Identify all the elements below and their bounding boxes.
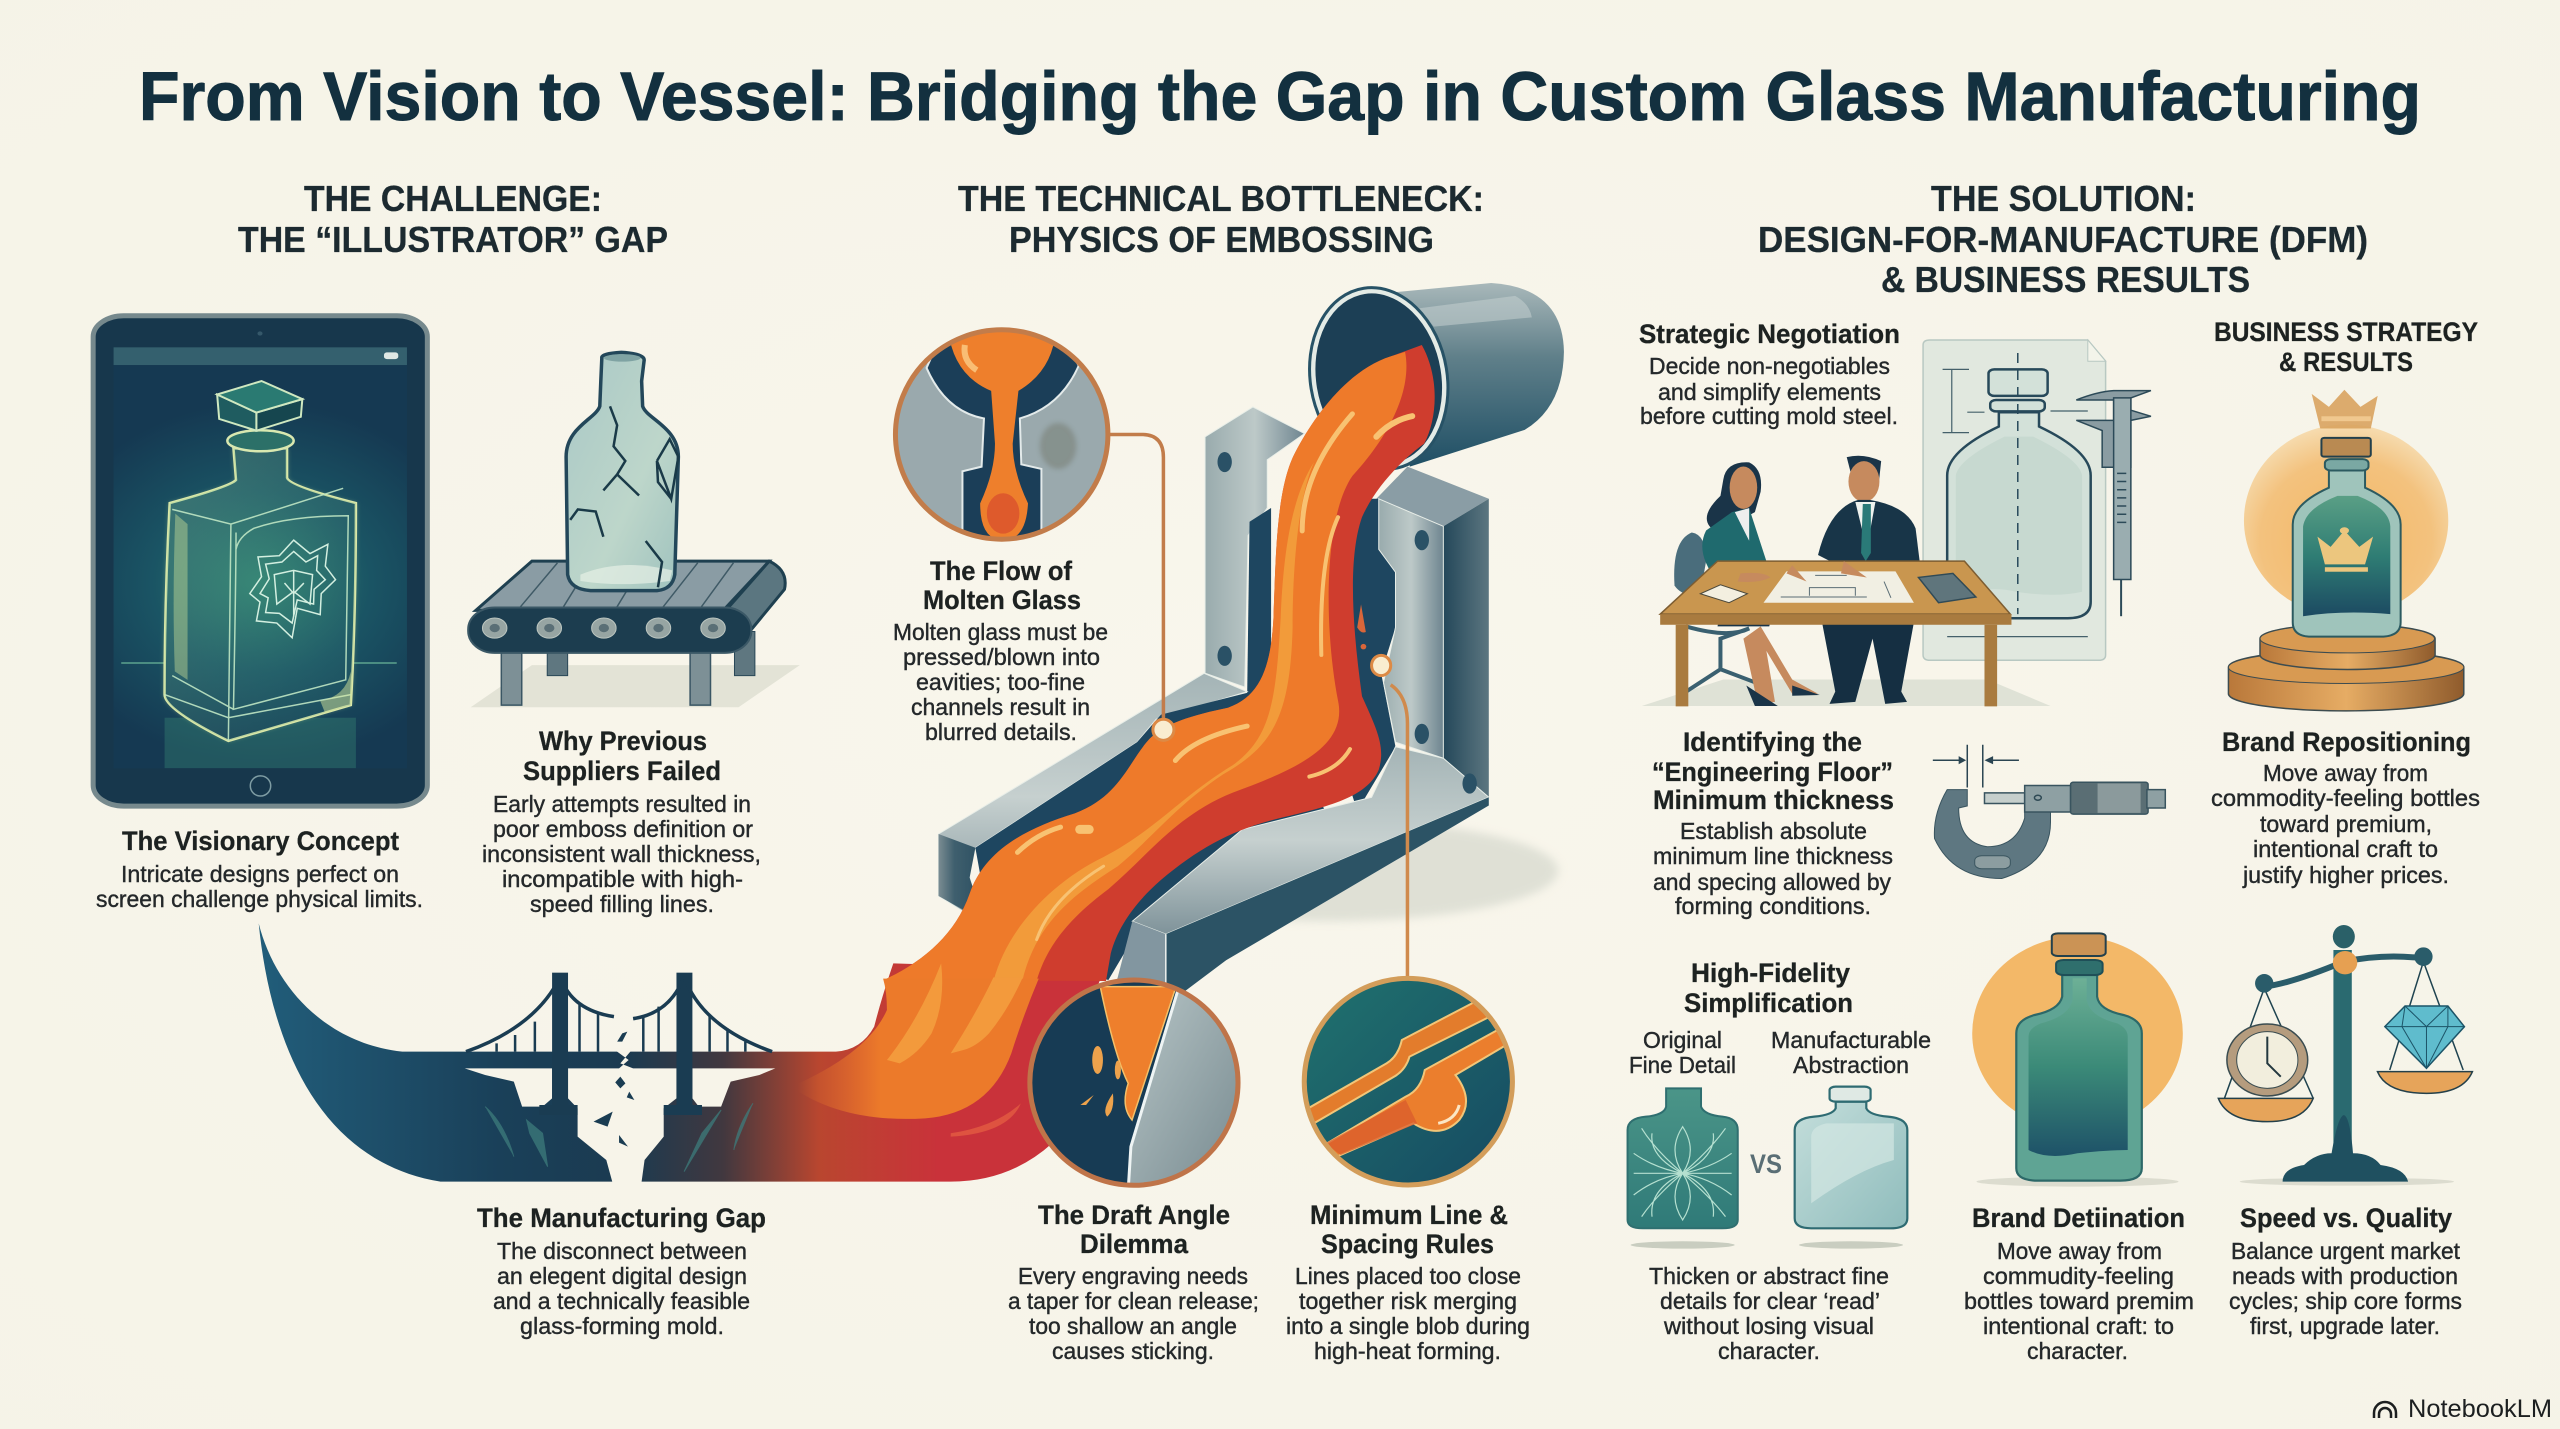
text: flow of molten glass [893, 556, 1108, 745]
text: the draft angle dilemma [1008, 1200, 1259, 1364]
text: simplification description: details for clear ‘read’ [1660, 1288, 1880, 1314]
text: why previous suppliers failed: Why Previous [539, 726, 707, 756]
icon: green bottle with sun [1972, 933, 2183, 1187]
text: flow of molten glass: channels result in [911, 694, 1090, 720]
text: why previous suppliers failed: poor emboss definition or [493, 816, 753, 842]
logo: NotebookLM: NotebookLM [2408, 1395, 2552, 1423]
text: the visionary concept: The Visionary Concept [122, 826, 399, 856]
label: manufacturable abstraction: Manufacturable [1771, 1027, 1931, 1053]
text: flow of molten glass: The Flow of [930, 556, 1073, 586]
text: the manufacturing gap: The disconnect between [497, 1238, 747, 1264]
text: brand definition: Move away from [1997, 1238, 2162, 1264]
text: flow of molten glass: eavities; too-fine [916, 669, 1085, 695]
text: simplification description: Thicken or abstract fine [1649, 1263, 1889, 1289]
text: speed vs quality: Balance urgent market [2231, 1238, 2461, 1264]
icon: crowned bottle on pedestal [2228, 390, 2464, 711]
heading: the challenge: THE “ILLUSTRATOR” GAP [238, 219, 668, 260]
text: simplification description: without losing visual [1663, 1313, 1874, 1339]
text: strategic negotiation: before cutting mold steel. [1640, 403, 1898, 429]
text: identifying the engineering floor: Minimum thickness [1653, 785, 1894, 815]
illustration: molten glass stream [791, 345, 1435, 1137]
illustration: blueprint bottle, caliper and negotiating team [1642, 340, 2151, 706]
heading: business strategy and results: BUSINESS STRATEGY [2214, 317, 2478, 347]
heading: business strategy and results: & RESULTS [2279, 347, 2413, 377]
circle: draft angle detail [1030, 977, 1249, 1190]
text: identifying the engineering floor: forming conditions. [1675, 893, 1871, 919]
text: high-fidelity simplification heading: High-Fidelity [1691, 958, 1850, 988]
text: brand definition: character. [2027, 1338, 2128, 1364]
heading: technical bottleneck: PHYSICS OF EMBOSSING [1009, 219, 1434, 260]
shape: manufacturing gap bridge merging into molten flow [259, 923, 1104, 1183]
circle: minimum line and spacing detail [1302, 978, 1512, 1185]
text: minimum line and spacing rules: high-heat forming. [1314, 1338, 1501, 1364]
circle: flow of molten glass detail [895, 324, 1108, 545]
text: simplification description [1649, 1263, 1889, 1364]
text: identifying the engineering floor: Identifying the [1683, 727, 1862, 757]
text: brand repositioning: toward premium, [2260, 811, 2432, 837]
text: the visionary concept: Intricate designs perfect on [121, 861, 399, 887]
text: flow of molten glass: Molten glass must be [893, 619, 1108, 645]
arrow: connector from mold to line spacing circle [1372, 655, 1407, 990]
illustration: steel mold and tilted crucible [939, 278, 1564, 1013]
text: identifying the engineering floor: and specing allowed by [1653, 869, 1891, 895]
label: manufacturable abstraction: Abstraction [1793, 1052, 1909, 1078]
text: the manufacturing gap: The Manufacturing Gap [477, 1203, 766, 1233]
label: manufacturable abstraction [1771, 1027, 1931, 1078]
text: strategic negotiation [1639, 319, 1900, 429]
text: minimum line and spacing rules: into a single blob during [1286, 1313, 1530, 1339]
text: brand repositioning: intentional craft to [2253, 836, 2438, 862]
text: the draft angle dilemma: causes sticking. [1052, 1338, 1214, 1364]
icon: micrometer [1933, 745, 2165, 879]
arrow: connector from flow circle to mold [1108, 434, 1174, 740]
text: minimum line and spacing rules: Spacing Rules [1321, 1229, 1494, 1259]
text: flow of molten glass: pressed/blown into [903, 644, 1100, 670]
label: original fine detail: Fine Detail [1629, 1052, 1736, 1078]
text: the manufacturing gap: and a technically feasible [493, 1288, 750, 1314]
heading: the challenge: THE CHALLENGE: [304, 178, 602, 219]
heading: the challenge [238, 178, 668, 260]
text: strategic negotiation: Strategic Negotiation [1639, 319, 1900, 349]
text: identifying the engineering floor: Establish absolute [1680, 818, 1867, 844]
text: identifying the engineering floor [1652, 727, 1894, 919]
text: speed vs quality: Speed vs. Quality [2240, 1203, 2452, 1233]
text: brand repositioning: Brand Repositioning [2222, 727, 2471, 757]
text: flow of molten glass: blurred details. [925, 719, 1077, 745]
label: vs: VS [1750, 1149, 1782, 1179]
text: simplification description: character. [1718, 1338, 1820, 1364]
label: original fine detail [1629, 1027, 1736, 1078]
text: the draft angle dilemma: too shallow an angle [1029, 1313, 1237, 1339]
text: brand repositioning: Move away from [2263, 760, 2428, 786]
text: the manufacturing gap: an elegent digital design [497, 1263, 747, 1289]
icon: ornate bottle [1628, 1088, 1738, 1249]
text: why previous suppliers failed: Early attempts resulted in [493, 791, 751, 817]
icon: simplified bottle [1795, 1087, 1907, 1249]
text: the visionary concept: screen challenge physical limits. [96, 886, 423, 912]
text: minimum line and spacing rules: together risk merging [1299, 1288, 1517, 1314]
icon: tablet with glowing bottle [93, 316, 427, 806]
text: strategic negotiation: and simplify elements [1658, 379, 1881, 405]
text: why previous suppliers failed: speed filling lines. [530, 891, 714, 917]
text: the manufacturing gap: glass-forming mold. [520, 1313, 724, 1339]
text: speed vs quality [2229, 1203, 2462, 1339]
text: minimum line and spacing rules: Lines placed too close [1295, 1263, 1521, 1289]
text: the draft angle dilemma: Every engraving needs [1018, 1263, 1248, 1289]
text: flow of molten glass: Molten Glass [923, 585, 1081, 615]
text: brand repositioning: justify higher prices. [2242, 862, 2449, 888]
text: the draft angle dilemma: a taper for clean release; [1008, 1288, 1259, 1314]
text: speed vs quality: cycles; ship core forms [2229, 1288, 2462, 1314]
heading: business strategy and results [2214, 317, 2478, 377]
text: why previous suppliers failed: inconsistent wall thickness, [482, 841, 761, 867]
text: the draft angle dilemma: Dilemma [1080, 1229, 1189, 1259]
text: brand definition: commudity-feeling [1983, 1263, 2174, 1289]
text: the draft angle dilemma: The Draft Angle [1038, 1200, 1230, 1230]
heading: the solution: THE SOLUTION: [1931, 178, 2196, 219]
text: minimum line and spacing rules [1286, 1200, 1530, 1364]
text: why previous suppliers failed: incompatible with high- [502, 866, 743, 892]
icon: cracked bottle on conveyor [468, 352, 800, 707]
text: high-fidelity simplification heading: Simplification [1684, 988, 1853, 1018]
icon: balance scale with clock and diamond [2218, 925, 2472, 1186]
heading: the solution: & BUSINESS RESULTS [1881, 259, 2250, 300]
text: brand definition [1964, 1203, 2194, 1364]
text: speed vs quality: neads with production [2232, 1263, 2458, 1289]
text: identifying the engineering floor: “Engineering Floor” [1652, 757, 1893, 787]
text: why previous suppliers failed [482, 726, 761, 917]
text: brand repositioning [2211, 727, 2480, 888]
heading: technical bottleneck: THE TECHNICAL BOTTLENECK: [958, 178, 1484, 219]
heading: the solution: DESIGN-FOR-MANUFACTURE (DFM) [1758, 219, 2368, 260]
heading: technical bottleneck [958, 178, 1484, 260]
heading: the solution [1758, 178, 2368, 300]
text: the visionary concept [96, 826, 423, 912]
text: strategic negotiation: Decide non-negotiables [1649, 353, 1890, 379]
text: brand definition: intentional craft: to [1983, 1313, 2174, 1339]
text: why previous suppliers failed: Suppliers Failed [523, 756, 721, 786]
text: identifying the engineering floor: minimum line thickness [1653, 843, 1893, 869]
text: the manufacturing gap [477, 1203, 766, 1339]
text: minimum line and spacing rules: Minimum Line & [1310, 1200, 1508, 1230]
text: brand definition: Brand Detiination [1972, 1203, 2185, 1233]
text: high-fidelity simplification heading [1684, 958, 1853, 1018]
text: brand definition: bottles toward premim [1964, 1288, 2194, 1314]
label: original fine detail: Original [1643, 1027, 1722, 1053]
title: From Vision to Vessel: Bridging the Gap in Custom Glass Manufacturing [139, 58, 2421, 135]
text: speed vs quality: first, upgrade later. [2250, 1313, 2440, 1339]
text: brand repositioning: commodity-feeling bottles [2211, 785, 2480, 811]
